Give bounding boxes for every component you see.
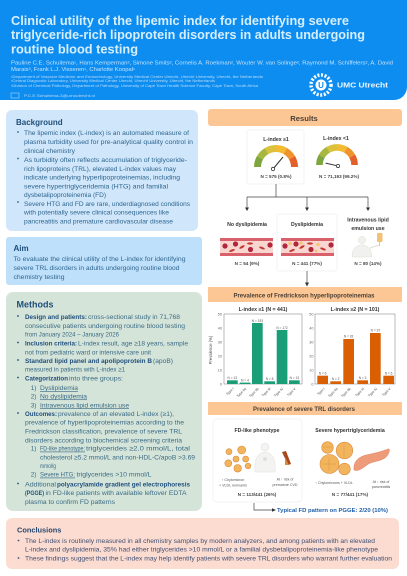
background bullets: pancreatitis and premature cardiovascular disease — [24, 219, 173, 226]
methods bullets: polyacrylamide gradient gel electrophoresis — [57, 481, 190, 488]
icon: remnant particles — [225, 446, 251, 472]
methods bullets: Outcomes: — [25, 411, 57, 418]
background bullets: The lipemic index (L-index) is an automated measure of — [24, 130, 189, 137]
affiliations: ³Division of Chemical Pathology, Department of Pathology, University of Cape Town Health Science Faculty, Cape Town, South Africa — [11, 84, 258, 88]
bar chart: L-index at least 2: N = 6 — [319, 371, 327, 375]
email: P.C.E.Schuitema-3@umcutrecht.nl — [24, 93, 95, 98]
methods bullets: Severe HTG: — [40, 472, 75, 479]
bar chart: L-index at least 1: 40 — [218, 326, 222, 330]
group: intravenous lipid emulsion — [347, 218, 389, 266]
background bullets: with potentially severe clinical consequences like — [23, 210, 169, 217]
bar chart: L-index at least 2: N = 6 — [385, 371, 393, 375]
heading bar: severe TRL disorders — [208, 402, 402, 415]
callout: PGGE result: Typical FD pattern on PGGE: 2/20 (10%) — [277, 508, 388, 514]
background bullets: severe hypertriglyceridemia (HTG) and familial — [24, 183, 168, 190]
methods bullets: (apoB) — [153, 358, 173, 365]
bar chart: L-index at least 2: 30 — [309, 340, 314, 344]
title: routine blood testing — [11, 42, 138, 56]
methods bullets: 1) — [31, 385, 36, 392]
bar chart: L-index at least 1: Type I — [225, 387, 235, 396]
heading: conclusions: Conclusions — [17, 526, 61, 534]
methods bullets: Intravenous lipid emulsion use — [40, 402, 129, 409]
bar chart: L-index at least 1: N = 8 — [266, 377, 274, 381]
group: intravenous lipid emulsion: emulsion use — [351, 226, 385, 232]
bar chart: L-index at least 1: N = 13 — [290, 376, 299, 380]
gauge: L-index below 1: L-index <1 — [323, 136, 349, 142]
title: triglyceride-rich lipoprotein disorders in adults undergoing — [11, 28, 365, 42]
background bullets: Severe HTG and FD are rare, underdiagnosed conditions — [24, 201, 190, 208]
heading bar: Fredrickson prevalence — [208, 287, 402, 302]
background bullets: indicate underlying hyperlipoproteinemias, including — [24, 175, 180, 182]
arrow: to PGGE result — [254, 503, 276, 512]
bar chart: L-index at least 2: N = 37 — [371, 329, 380, 333]
methods bullets: consecutive patients undergoing routine blood testing — [25, 323, 185, 330]
bar chart: L-index at least 1: 30 — [218, 340, 222, 344]
bar chart: L-index at least 2: Type III — [355, 387, 365, 398]
bar chart: L-index at least 1: Type IV — [273, 386, 285, 398]
gauge: L-index below 1: N = 71,193 (99.2%) — [319, 174, 359, 179]
bar chart: L-index at least 2: N = 33 — [344, 335, 354, 339]
icon: torso and artery — [255, 443, 291, 472]
icon: blood vessel with lipoproteins — [281, 238, 334, 256]
bar chart: L-index at least 1: Type III — [261, 387, 272, 398]
affiliations — [11, 75, 264, 88]
arrow: to Fredrickson chart — [305, 271, 309, 286]
gauge card: L-index at least 1: N = 575 (0.8%) — [260, 174, 292, 179]
heading bar: severe TRL disorders: Prevalence of severe TRL disorders — [253, 407, 356, 413]
background bullets: rich lipoproteins (TRL), elevated L-index values may — [24, 166, 177, 173]
gauge card: L-index at least 1: L-index ≥1 — [263, 137, 289, 143]
panel: severe hypertriglyceridemia: ↑ Chylomicrons + VLDL — [315, 481, 353, 485]
bar chart: L-index at least 2: 10 — [309, 368, 314, 372]
bar chart: L-index at least 1: 20 — [218, 354, 222, 358]
methods bullets: cross-sectional study in 71,768 — [88, 314, 180, 321]
panel: FD-like phenotype — [213, 419, 302, 502]
panel: severe hypertriglyceridemia — [315, 428, 390, 497]
panel: aim — [6, 237, 202, 285]
bar chart: L-index at least 1: 50 — [218, 312, 222, 316]
aim text: To evaluate the clinical utility of the L-index for identifying — [14, 256, 186, 263]
panel: severe hypertriglyceridemia: Severe hypertriglyceridemia — [315, 428, 385, 434]
bar chart: L-index at least 2: Type IV — [367, 386, 379, 398]
methods bullets: 2) — [31, 393, 36, 400]
bar chart: L-index at least 1: Type IIb — [248, 387, 260, 398]
bar chart: L-index at least 2 — [309, 307, 395, 398]
UMC Utrecht logo — [311, 75, 389, 95]
methods bullets: Inclusion criteria: — [25, 341, 77, 348]
panel: background — [6, 110, 198, 231]
heading: methods: Methods — [16, 300, 54, 310]
methods bullets: not from pediatric ward or intensive care unit — [25, 350, 151, 357]
title: Clinical utility of the lipemic index for identifying severe — [11, 14, 349, 28]
header banner — [0, 0, 407, 100]
bar chart: L-index at least 1: Type V — [286, 386, 297, 397]
methods bullets: disorders according to biochemical screening criteria — [25, 437, 182, 444]
bar chart: L-index at least 1: N = 13 — [228, 376, 237, 380]
panel: FD-like phenotype: N = 113/441 (26%) — [238, 492, 277, 497]
methods bullets: plasma to confirm FD patterns — [25, 499, 115, 506]
methods bullets: into three groups: — [69, 376, 123, 383]
icon: gauge low — [319, 147, 355, 168]
heading: background: Background — [16, 118, 63, 127]
affiliations: ²Central Diagnostic Laboratory, University Medical Center Utrecht, Utrecht University, Utrecht, the Netherlands — [11, 79, 216, 83]
icon: gauge high — [258, 148, 294, 171]
methods bullets: 3) — [31, 402, 36, 409]
aim text: severe TRL disorders in adults undergoing routine blood — [14, 265, 180, 272]
aim text: chemistry testing — [14, 274, 65, 281]
methods bullets: FD-like phenotype: — [40, 446, 85, 453]
conclusions bullets: These findings suggest that the L-index may help identify patients with severe TRL disorders who warrant further evaluation — [25, 556, 392, 563]
title — [11, 14, 365, 56]
icon: chylomicron particles — [320, 442, 353, 475]
panel: FD-like phenotype: At ↑ risk of — [277, 478, 293, 482]
panel: FD-like phenotype: ↑ Chylomicron — [222, 478, 244, 482]
methods bullets: Categorization — [25, 376, 68, 383]
background bullets: As turbidity often reflects accumulation of triglyceride- — [24, 157, 187, 164]
authors: Pauline C.E. Schuitema¹, Hans Kemperman², Simone Smits², Cornelis A. Roekman², Wouter W. van Solinge², Raymond M. Schiffelers², A. David — [11, 60, 393, 66]
methods bullets: (PGGE) — [25, 490, 44, 497]
arrows: tree to three groups — [245, 184, 370, 211]
panel: FD-like phenotype: + VLDL remnants — [219, 484, 247, 488]
group: no dyslipidemia — [220, 222, 273, 266]
UMC Utrecht logo: UMC Utrecht — [337, 81, 389, 90]
bar chart: L-index at least 2: 50 — [309, 312, 314, 316]
panel: severe hypertriglyceridemia: pancreatitis — [372, 485, 390, 489]
bar chart: L-index at least 1: 0 — [220, 382, 222, 386]
methods bullets: cholesterol ≥5.2 mmol/L and non-HDL-C/apoB >3.69 — [40, 454, 195, 461]
heading bar: Fredrickson prevalence: Prevalence of Fredrickson hyperlipoproteinemias — [233, 294, 375, 300]
icon: blood vessel — [220, 238, 273, 256]
bar chart: L-index at least 2: Type I — [316, 387, 326, 396]
bar chart: L-index at least 2: Type IIb — [340, 387, 352, 398]
group: no dyslipidemia: N = 54 (9%) — [235, 261, 260, 266]
bar chart: L-index at least 2: 20 — [309, 354, 314, 358]
panel: methods — [6, 292, 202, 511]
bar chart: L-index at least 2: L-index ≥2 (N = 101) — [331, 307, 380, 313]
group: no dyslipidemia: No dyslipidemia — [227, 222, 267, 228]
panel: severe hypertriglyceridemia: N = 77/441 (17%) — [332, 492, 369, 497]
methods bullets: 1) — [31, 446, 36, 453]
panel: FD-like phenotype: FD-like phenotype — [235, 428, 280, 434]
heading: aim: Aim — [14, 244, 29, 253]
bar chart: L-index at least 1: Prevalence (%) — [208, 335, 213, 364]
background bullets — [17, 130, 193, 226]
background bullets: clinical chemistry — [24, 148, 76, 155]
group: dyslipidemia: Dyslipidemia — [291, 222, 323, 228]
background bullets: dysbetalipoproteinemia (FD) — [24, 192, 106, 199]
methods bullets: triglycerides >10 mmol/L — [76, 472, 152, 479]
methods bullets: Standard lipid panel and apolipoprotein B — [25, 358, 152, 365]
methods bullets: prevalence of hyperlipoproteinemias according to the — [25, 420, 184, 427]
bar chart: L-index at least 1: 10 — [218, 368, 222, 372]
group: dyslipidemia — [277, 214, 337, 271]
bar chart: L-index at least 2: Type V — [381, 386, 392, 397]
methods bullets: Fredrickson classification, prevalence of severe TRL — [25, 428, 182, 435]
conclusions bullets: L-index and dyslipidemia, 35% had either triglycerides >10 mmol/L or a familial dysbetalipoproteinemia-like phenotype — [25, 547, 379, 554]
methods bullets: 2) — [31, 472, 36, 479]
bar chart: L-index at least 1: N = 172 — [276, 326, 288, 330]
methods bullets: triglycerides ≥2.0 mmol/L, total — [86, 446, 190, 453]
icon: patient with infusion bag — [352, 233, 382, 257]
bar chart: L-index at least 1: N = 193 — [252, 319, 263, 323]
affiliations: ¹Department of Vascular Medicine and Endocrinology, University Medical Center Utrecht, Utrecht University, Utrecht, the Netherlands — [11, 75, 264, 79]
methods bullets: L-index result, age ≥18 years, sample — [78, 341, 188, 348]
panel: conclusions — [6, 518, 399, 569]
panel: severe hypertriglyceridemia: At ↑ risk of — [373, 480, 389, 484]
methods bullets: mmol/g — [40, 463, 56, 470]
methods bullets — [17, 314, 195, 506]
methods bullets: prevalence of an elevated L-index (≥1), — [58, 411, 174, 418]
methods bullets: Dyslipidemia — [40, 385, 78, 392]
group: intravenous lipid emulsion: Intravenous lipid — [347, 218, 389, 224]
methods bullets: Design and patients: — [25, 314, 87, 321]
methods bullets: Additional — [25, 481, 56, 488]
bar chart: L-index at least 1: N = 4 — [241, 378, 249, 382]
bar chart: L-index at least 1: Type IIa — [236, 387, 247, 398]
gauge: L-index below 1 — [319, 136, 359, 179]
heading bar: results — [208, 109, 402, 126]
bar chart: L-index at least 2: 40 — [309, 326, 314, 330]
background bullets: plasma turbidity used for pre-analytical quality control in — [24, 139, 193, 146]
bar chart: L-index at least 1 — [208, 307, 302, 398]
group: dyslipidemia: N = 441 (77%) — [292, 261, 322, 266]
methods bullets: No dyslipidemia — [40, 393, 87, 400]
bar chart: L-index at least 1: L-index ≥1 (N = 441) — [239, 307, 288, 313]
UMC Utrecht logo: U — [318, 81, 324, 90]
bar chart: L-index at least 2: 0 — [311, 382, 314, 386]
authors — [11, 60, 393, 73]
gauge card: L-index at least 1 — [247, 130, 304, 184]
conclusions bullets — [18, 538, 392, 563]
methods bullets: in FD-like patients with available leftover EDTA — [46, 490, 187, 497]
bar chart: L-index at least 2: N = 3 — [359, 376, 367, 380]
conclusions bullets: The L-index is routinely measured in all chemistry samples by modern analyzers, and among patients with an elevated — [25, 538, 375, 545]
panel: FD-like phenotype: premature CVD — [273, 483, 298, 487]
authors: Marais³, Frank L.J. Visseren¹, Charlotte Koopal¹ — [11, 67, 135, 73]
methods bullets: from January 2024 – January 2026 — [25, 332, 119, 339]
bar chart: L-index at least 2: Type IIa — [327, 387, 339, 398]
icon: pancreas — [354, 449, 389, 471]
bar chart: L-index at least 2: N = 2 — [332, 377, 340, 381]
methods bullets: measured in patients with L-index ≥1 — [25, 367, 125, 374]
heading bar: results: Results — [290, 114, 318, 123]
group: intravenous lipid emulsion: N = 80 (14%) — [354, 261, 382, 266]
aim text — [14, 256, 186, 281]
